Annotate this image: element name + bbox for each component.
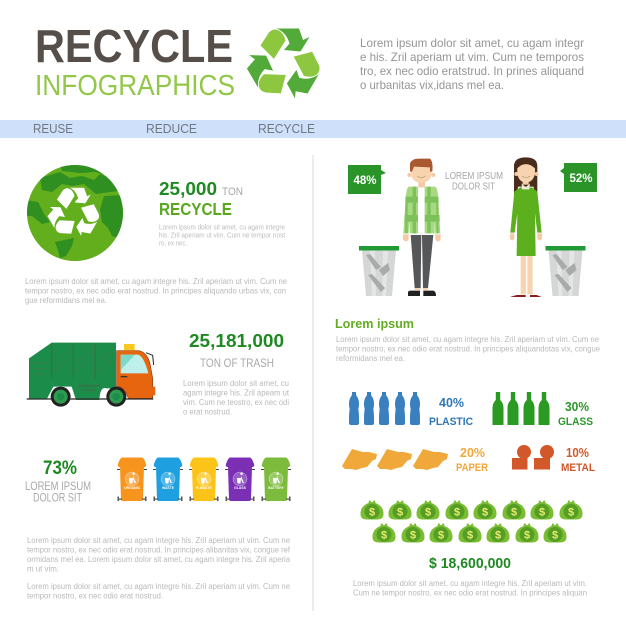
bin: battery: BATTERY [268,486,285,490]
icons: money bags: $ [524,530,530,542]
icons: money bags: $ [454,506,460,518]
icons: paper sheets [342,449,448,470]
text block: lower left paragraph: Lorem ipsum dolor sit amet, cu agam integre his. Zril aperiam ut vim. Cum ne [27,535,290,545]
stat: 25,000 ton [159,179,243,199]
icons: money bags: $ [467,530,473,542]
stat: 10% metal [561,446,595,474]
stat: 25,181,000: 25,181,000 [189,331,284,351]
icons: money bags: $ [369,506,375,518]
icons: money bags: $ [511,506,517,518]
label: lorem ipsum dolor sit: LOREM IPSUM [25,479,91,493]
text block: money note: Lorem ipsum dolor sit amet, cu agam integre his. Zril aperiam ut vim. [353,578,587,588]
text block: header intro [360,36,584,92]
bin: blue [153,458,183,501]
text block: recycle paragraph: Lorem ipsum dolor sit amet, cu agam integre his. Zril aperiam ut vim. Cum ne [25,276,287,286]
text block: recycle note: Lorem ipsum dolor sit amet, cu agam integre [159,224,285,232]
text block: recycle paragraph [25,276,287,305]
text block: lower left paragraph: tempor nostro, ex nec odio erat nostrud. [27,590,163,600]
icon: globe with recycle symbol [25,165,125,261]
heading: recycle: RECYCLE [159,199,232,219]
icon: trash can right [546,246,586,296]
title: recycle: RECYCLE [35,20,233,72]
icons: money bags: $ [381,530,387,542]
text block: recycle note: ro, ex nec. [159,240,187,248]
label: lorem ipsum dolor sit: DOLOR SIT [33,490,82,504]
icons: money bags: $ [397,506,403,518]
text block: trash note [183,378,290,416]
icons: glass bottles [492,392,550,425]
text block: recycle paragraph: tempor nostro, ex nec odio erat nostrud. In principes aliquando urbas vix, con [25,286,286,296]
stat: 20% paper: PAPER [456,462,488,474]
text block: trash note: Lorem ipsum dolor sit amet, cu [183,378,289,388]
icon: trash can left [359,246,399,296]
icons: money bags: $ [539,506,545,518]
stat: 25,000 ton: TON [222,186,243,198]
icons: plastic bottles [349,392,420,425]
stat: 40% plastic [429,396,473,428]
title: infographics: INFOGRAPHICS [35,70,235,102]
callout: 48%: 48% [353,175,377,187]
text block: lower left paragraph [27,535,291,600]
text block: trash note: o erat nostrud. [183,406,232,416]
icons: money bags: $ [482,506,488,518]
text block: lower left paragraph: ormidans mel ea. Lorem ipsum dolor sit amet, cu agam integre his. Zril aperia [27,554,290,564]
bin: organic [117,458,147,501]
label: lorem ipsum dolor sit [25,479,91,504]
navigation band [0,120,626,138]
navigation band: RECYCLE [258,122,315,136]
bin: glass [225,458,255,501]
text block: right paragraph: tempor nostro, ex nec odio erat nostrud. In principes aliquandotas vix, congue [336,344,600,354]
text block: right paragraph [336,334,600,363]
bin: e-waste [189,458,219,501]
navigation band: REDUCE [146,122,197,136]
bin: e-waste: E-WASTE [196,486,212,490]
icons: money bags: $ [552,530,558,542]
text block: lower left paragraph: Lorem ipsum dolor sit amet, cu agam integre his. Zril aperiam ut vim. Cum ne [27,581,290,591]
callout: 52%: 52% [569,173,593,185]
heading: lorem ipsum: Lorem ipsum [335,316,414,331]
bin: blue: WASTE [162,486,175,490]
stat: 73%: 73% [43,458,77,479]
navigation band: REUSE [33,122,73,136]
icon: garbage truck [27,343,155,407]
stat: 40% plastic: PLASTIC [429,416,473,428]
stat: 10% metal: 10% [566,446,589,460]
callout: 48% [348,165,386,194]
stat: 30% glass: GLASS [558,416,593,428]
text block: lower left paragraph: m ut vim. [27,564,59,574]
text block: right paragraph: reformidans mel ea. [336,353,405,363]
text block: header intro: o urbanitas vix,idans mel ea. [360,78,504,92]
bin: glass: GLASS [234,486,247,490]
text block: lower left paragraph: tempor nostro, ex nec odio erat nostrud. In principes alibanitas vix, congue ref [27,544,291,554]
bin: battery [261,458,291,501]
stat: $ 18,600,000: $ 18,600,000 [429,556,511,572]
figure: man [403,159,441,296]
icons: sorting bins [117,458,291,501]
text block: money note: Cum ne tempor nostro, ex nec odio erat nostrud. In principes aliquan [353,588,587,598]
icons: metal shapes [512,445,554,470]
icons: money bags: $ [568,506,574,518]
stat: 20% paper: 20% [460,446,485,460]
stat: 30% glass [558,400,593,428]
stat: 10% metal: METAL [561,462,595,474]
text block: trash note: agam integre his. Zril apeam ut [183,388,290,398]
label: lorem ipsum dolor sit [445,171,503,192]
stat: 40% plastic: 40% [439,396,464,410]
label: lorem ipsum dolor sit: LOREM IPSUM [445,171,503,182]
text block: header intro: e his. Zril aperiam ut vim. Cum ne temporos [360,50,584,64]
icons: money bags: $ [495,530,501,542]
icons: money bags [360,500,582,542]
icons: money bags: $ [438,530,444,542]
label: ton of trash: TON OF TRASH [200,356,274,370]
callout: 52% [560,163,597,192]
text block: trash note: vim. Cum ne teostro, ex nec odi [183,397,289,407]
text block: recycle paragraph: gue reformidans mel ea. [25,295,107,305]
figure: woman [510,157,542,297]
text block: recycle note: his. Zril aperiam ut vim. Cum ne tempor nost [159,232,285,240]
bin: organic: ORGANIC [124,486,141,490]
text block: money note [353,578,587,598]
text block: right paragraph: Lorem ipsum dolor sit amet, cu agam integre his. Zril aperiam ut vim. Cum ne [336,334,599,344]
stat: 20% paper [456,446,488,474]
stat: 25,000 ton: 25,000 [159,179,217,199]
text block: header intro: Lorem ipsum dolor sit amet, cu agam integr [360,36,584,50]
text block: recycle note [159,224,285,248]
text block: header intro: tro, ex nec odio eratstrud. In prines aliquand [360,64,584,78]
icon: recycle logo [242,28,327,103]
stat: 30% glass: 30% [565,400,589,414]
label: lorem ipsum dolor sit: DOLOR SIT [452,182,495,192]
icons: money bags: $ [425,506,431,518]
icons: money bags: $ [410,530,416,542]
